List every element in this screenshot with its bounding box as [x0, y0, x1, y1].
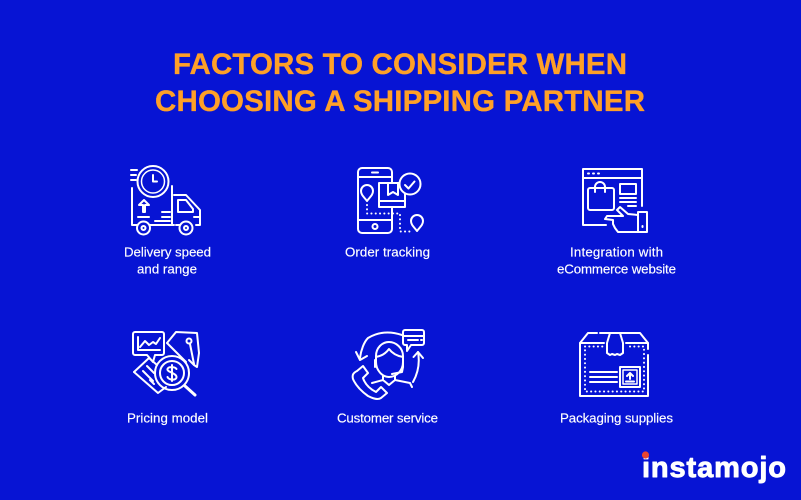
label: order tracking: Order tracking: [345, 244, 430, 260]
icon: order tracking phone: [358, 168, 423, 233]
label: integration: [557, 244, 676, 276]
icon: delivery truck with clock: [131, 166, 200, 234]
label: delivery speed: [124, 244, 211, 276]
title: CHOOSING A SHIPPING PARTNER: [155, 85, 645, 118]
icon: customer service agent: [353, 330, 424, 399]
icon: ecommerce website with pointing hand: [583, 169, 647, 232]
label: integration: eCommerce website: [557, 262, 676, 276]
title: FACTORS TO CONSIDER WHEN: [173, 48, 627, 81]
icon: packaging box: [580, 333, 648, 396]
icon: pricing magnifier: [133, 332, 199, 395]
label: delivery speed: and range: [137, 262, 197, 276]
label: delivery speed: Delivery speed: [124, 244, 211, 260]
logo: instamojo: instamojo: [642, 452, 786, 484]
label: integration: Integration with: [570, 244, 663, 260]
label: customer service: Customer service: [337, 410, 438, 426]
title: [155, 48, 645, 118]
label: packaging supplies: Packaging supplies: [560, 410, 673, 426]
label: pricing model: Pricing model: [127, 410, 208, 426]
